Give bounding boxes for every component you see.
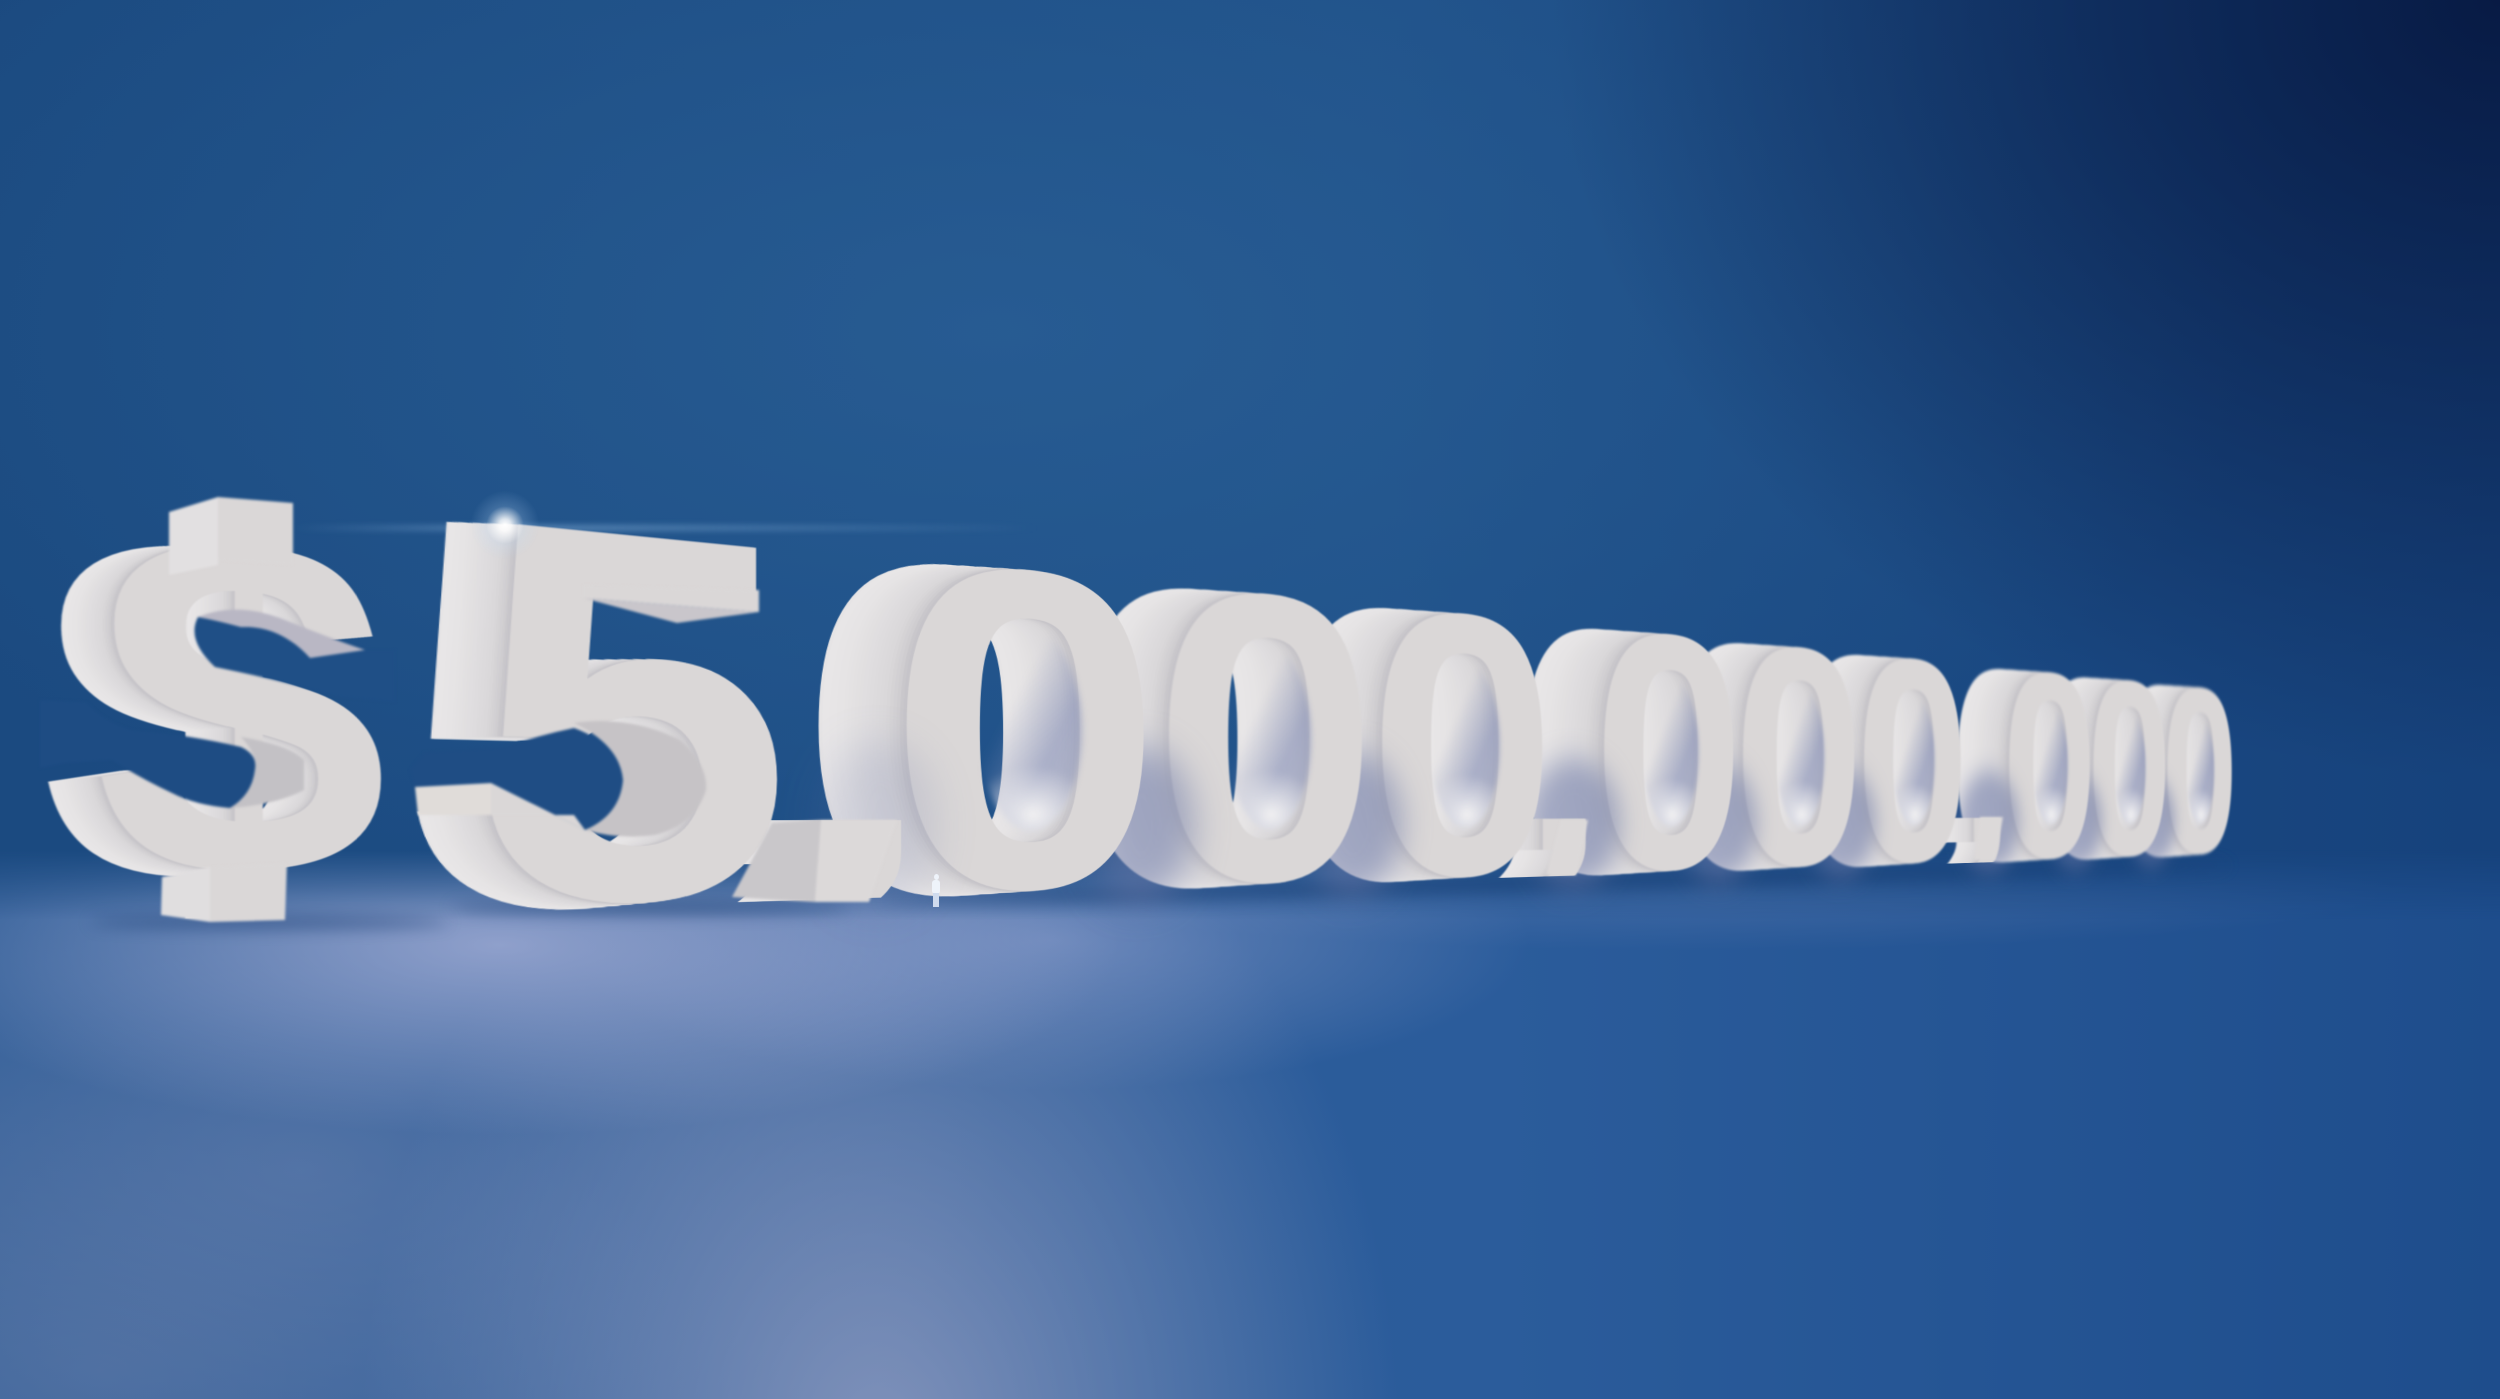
glint on top corner of the five [470, 490, 540, 560]
comma two: , [1521, 660, 1605, 895]
dollar sign upper counter and wall [194, 610, 395, 702]
ground shadow under five [450, 902, 850, 914]
comma three block [1974, 817, 2003, 860]
zero two: 0 [1151, 494, 1377, 975]
zero three: 0 [1368, 524, 1555, 960]
dollar sign lower counter and wall [40, 700, 304, 808]
comma one: , [779, 602, 937, 925]
dollar sign bottom stub [161, 863, 287, 922]
floor with light reflection [0, 850, 2500, 1399]
dollar sign: $ [94, 418, 388, 986]
light streak [290, 525, 1040, 531]
dollar sign top stub [169, 497, 293, 575]
icon: tiny person for scale [932, 874, 940, 907]
five top bar thickening and wall [583, 585, 759, 623]
zero seven: 0 [2002, 611, 2096, 916]
comma one block [732, 820, 897, 902]
comma two block [1546, 820, 1588, 875]
zero four: 0 [1593, 555, 1743, 944]
zero one: 0 [885, 457, 1162, 993]
big number on a perspective plane [47, 400, 2237, 1021]
digit five: 5 [471, 400, 791, 1021]
zero eight: 0 [2087, 623, 2171, 910]
ground shadow under zeros [880, 858, 2230, 908]
ground shadow under dollar sign [90, 916, 450, 928]
five lower counter and inner wall [410, 721, 706, 837]
zero nine: 0 [2162, 633, 2237, 905]
zero six: 0 [1856, 591, 1968, 926]
zero seven [1956, 611, 2096, 916]
zero five: 0 [1733, 574, 1863, 935]
comma three: , [1961, 695, 2012, 877]
